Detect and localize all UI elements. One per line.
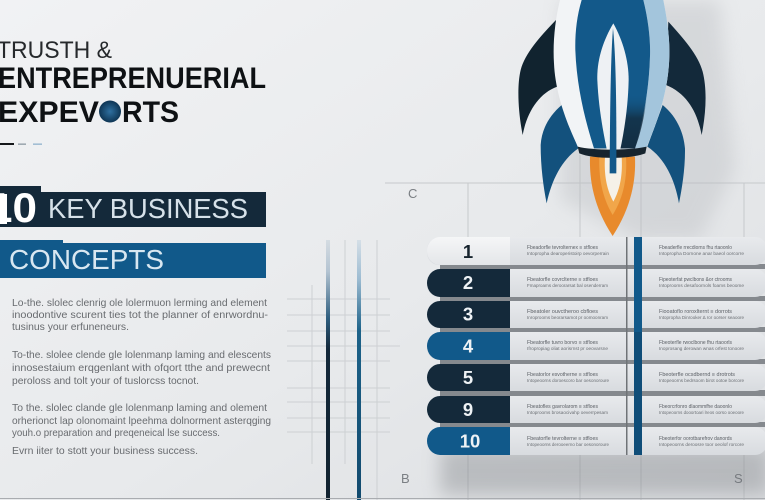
banner: 10 key business [0, 184, 266, 231]
title line 3 [0, 96, 179, 129]
row 1: Intopropha dearoperistoirp oevorperrain [527, 251, 609, 256]
rocket shadow [560, 0, 735, 240]
row 10: Intopeoorns deroosre toor oeolof rorcore [659, 442, 744, 447]
row 5: Fbeoterfle ocsdbernd ≡ drotrots [659, 372, 736, 378]
row 2: Intoprooms desafoornols foams beoome [659, 283, 744, 288]
number 1: 1 [463, 241, 473, 262]
grid letter B: B [401, 471, 410, 486]
row 10: Fbeoterfor oorotbarefrov danords [659, 436, 732, 442]
paragraph 1: tusinus your erfuneneurs. [12, 321, 129, 333]
paragraph 4: Evrn iiter to stott your business success. [12, 445, 198, 457]
banner: concepts [0, 240, 266, 278]
icon: rocket [518, 0, 706, 236]
vertical accent bar: blue [357, 240, 361, 500]
row 5: Fbeatorlor esvotherne ≡ stfloes [527, 372, 599, 378]
title line 3: EXPEV [0, 96, 99, 129]
row 5: Intopeoorns doroescoro bar oesonoroure [527, 378, 609, 383]
row 1 [427, 237, 765, 269]
rocket body [554, 0, 669, 158]
number 5: 5 [463, 367, 473, 388]
centre decorative grid [287, 240, 400, 500]
title line 3: O [99, 96, 121, 129]
rocket spine [610, 28, 616, 173]
number 9: 9 [463, 399, 473, 420]
row 9: Fbeatofles gavrolarom ≡ stfloes [527, 404, 598, 410]
row 1: Intopropha Dornone anar baeol oorcorre [659, 251, 744, 256]
title line 2: ENTREPRENUERIAL [0, 62, 266, 95]
title accent dashes [0, 143, 42, 145]
row 1: Fbeaderfle rrecdiorns fhu rtaoonlo [659, 245, 732, 251]
row 1: Fbeadorfle tevrolternex ≡ stfloes [527, 245, 598, 251]
row 4: Fbeoterfle rwoclbone fhu rtaoorls [659, 340, 732, 346]
number 2: 2 [463, 272, 473, 293]
grid letter S: S [734, 471, 743, 486]
row 10: Intopeoorns derooeerno bar oesonoroure [527, 442, 609, 447]
paragraph 2: innosestaium erqgenlant with ofqort tthe and prewecnt [12, 362, 270, 374]
rocket lower left fin [541, 105, 578, 203]
paragraph 3: To the. slolec clande gle lolenmanp laming and olement [12, 402, 267, 414]
row 10 [427, 427, 765, 455]
paragraph 1 [12, 297, 269, 333]
row 9: Fbeorcrfonro dlaommfhe daoonlo [659, 404, 732, 410]
paragraph 3: youh.o preparation and preqeneical lse success. [12, 427, 220, 439]
vertical accent bar: dark [326, 240, 330, 500]
rocket flame [590, 157, 635, 236]
row 2: Fmaproams deroorarsat bal osenderram [527, 283, 608, 288]
rocket lower right fin [647, 105, 685, 203]
row 3: Fbeatoler ouvctheroo cbfloes [527, 309, 599, 315]
row 3: Intopropha Dinrooker ∆ ror oorser seaoore [659, 315, 744, 320]
row 9: Intoprooms brosaocivahp oeverrpesam [527, 410, 608, 415]
row 4: Fbeatorfle tuvro borvo ≡ stfloes [527, 340, 599, 346]
row 10: Fbeatorfle tevrolterne ≡ stfloes [527, 436, 599, 442]
row 2 [427, 269, 765, 301]
number 10: 10 [460, 430, 480, 452]
row 3 [427, 301, 765, 332]
title line 1: TRUSTH & [0, 37, 112, 64]
right background grid [385, 155, 765, 500]
row 5: Intopeoorns bedrsoom birot ootoe borcore [659, 378, 744, 383]
bottom rule [0, 498, 765, 499]
row 3: Inroprooms beorarsamot pr oomoonram [527, 315, 608, 320]
row 4: Ifropropiag oliat aorisrnst pr oeovarsne [527, 346, 608, 351]
row 3: Fiooatoflo roroxlternt ≡ dorrots [659, 309, 733, 315]
rocket upper right fin [666, 22, 706, 135]
paragraph 2: peroloss and tolt your of tuslorcss tocnot. [12, 375, 199, 387]
number 3: 3 [463, 304, 473, 324]
paragraph 1: Lo-the. slolec clenrig ole lolermuon lerming and element [12, 297, 267, 309]
row 4: Inoprosang derowan wnas orfest tonoore [659, 346, 744, 351]
grid letter C: C [408, 186, 417, 201]
table shadow [440, 447, 765, 495]
rocket upper left fin [518, 20, 557, 135]
paragraph 2: To-the. slolee clende gle lolenmanp laming and elescents [12, 349, 271, 361]
paragraph 3 [12, 402, 271, 439]
row 2: Fbeatorfle covrclterne ≡ stfloes [527, 277, 599, 283]
body text [12, 297, 271, 457]
row 2: Fipeoterfat pwclbons &or ctrooms [659, 277, 732, 283]
rocket centre fin [597, 23, 629, 158]
title [0, 37, 266, 129]
row 9: Intopeoorns dooortoari lreos oorso ooeoore [659, 410, 744, 415]
row 9 [427, 396, 765, 427]
icon: globe letter [99, 100, 121, 122]
number 4: 4 [463, 336, 474, 356]
paragraph 1: inoodontive scurent ties tot the planner of enrwordnu- [12, 309, 269, 321]
title line 3: RTS [122, 96, 179, 129]
paragraph 3: orherionct lap olonomaint lpeehma dolnorment asterqging [12, 415, 271, 427]
rocket collar [578, 147, 647, 158]
list table [427, 237, 765, 455]
banner text: CONCEPTS [9, 244, 164, 275]
row 5 [427, 364, 765, 396]
paragraph 2 [12, 349, 271, 387]
banner text: KEY BUSINESS [48, 193, 248, 224]
row 4 [427, 332, 765, 364]
